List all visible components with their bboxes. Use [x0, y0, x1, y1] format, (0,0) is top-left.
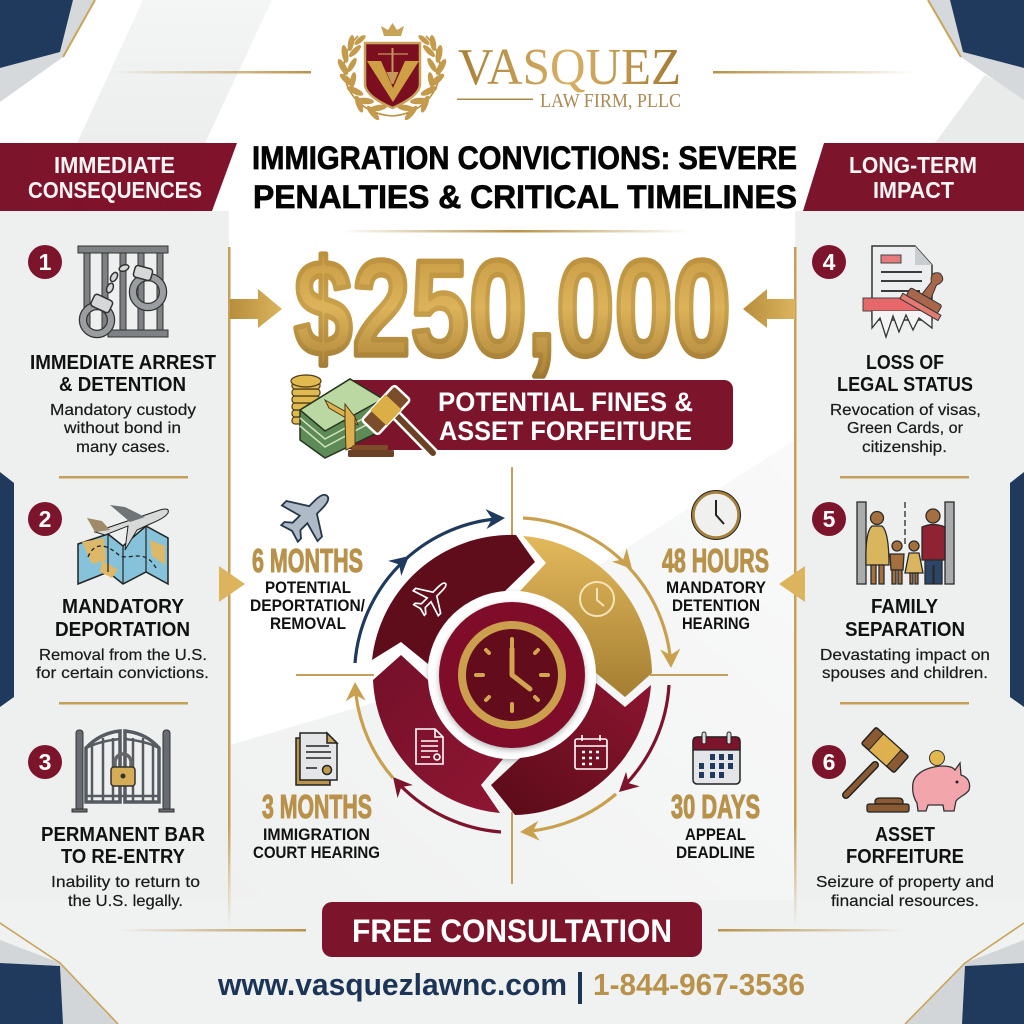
icon: plane: [272, 478, 345, 551]
arrow: gold top right: [523, 518, 681, 668]
banner: immediate consequences: [0, 143, 237, 211]
title: PENALTIES & CRITICAL TIMELINES: [253, 179, 797, 215]
logo subtitle: LAW FIRM, PLLC: [540, 90, 681, 112]
item 1: arrest: many cases.: [76, 439, 170, 456]
contact line: [217, 967, 805, 1004]
icon: separated family: [857, 502, 954, 584]
banner: immediate consequences: IMMEDIATE: [54, 152, 175, 178]
corner: bottom right: [905, 923, 1024, 1024]
corner: bottom left: [0, 923, 118, 1024]
title: IMMIGRATION CONVICTIONS: SEVERE: [252, 140, 797, 176]
arrow: maroon right: [612, 685, 669, 799]
badge 1: 1: [39, 249, 52, 275]
item 4: legal status: Revocation of visas,: [830, 402, 981, 419]
segment: 3 months: [373, 655, 503, 813]
big amount: $250,000: [294, 232, 731, 384]
corner: top left: [0, 0, 95, 102]
arrow: gold bottom: [519, 794, 616, 842]
call to action: [322, 902, 702, 957]
item 2: deportation: for certain convictions.: [36, 665, 209, 682]
icon: document: [296, 733, 337, 785]
item 6: asset forfeiture: FORFEITURE: [846, 845, 964, 868]
icon: handcuffs and bars: [78, 246, 168, 337]
item 5: family separation: spouses and children.: [822, 665, 988, 682]
item 4: legal status: [812, 245, 981, 456]
timeline: 3 months: IMMIGRATION: [263, 825, 370, 844]
item 6: asset forfeiture: Seizure of property and: [816, 874, 994, 891]
badge 3: [28, 745, 62, 779]
arrow: navy: [355, 508, 506, 663]
item 2: deportation: MANDATORY: [62, 595, 184, 618]
item 5: family separation: SEPARATION: [845, 618, 965, 641]
badge 5: [812, 502, 846, 536]
item 6: asset forfeiture: [812, 727, 994, 910]
icon: white plane: [407, 571, 458, 622]
item 5: family separation: FAMILY: [871, 595, 938, 618]
timeline: 3 months: [253, 733, 380, 862]
fines pill: [345, 380, 733, 450]
item 3: re-entry bar: [28, 730, 205, 910]
icon: white clock: [580, 582, 614, 616]
timeline: 6 months: REMOVAL: [270, 614, 346, 633]
item 3: re-entry bar: Inability to return to: [51, 874, 200, 891]
column rule: right: [794, 247, 796, 927]
timeline: 30 days: DEADLINE: [676, 843, 755, 862]
corner: top right: [928, 0, 1024, 100]
timeline: 3 months: COURT HEARING: [253, 843, 380, 862]
logo emblem: [336, 23, 448, 122]
banner: long-term impact: IMPACT: [873, 177, 954, 203]
item 1: arrest: Mandatory custody: [50, 402, 196, 419]
timeline: 30 days: 30 DAYS: [671, 788, 760, 825]
timeline: 6 months: DEPORTATION/: [250, 596, 365, 615]
fines pill: ASSET FORFEITURE: [439, 416, 692, 446]
badge 4: 4: [823, 249, 836, 275]
item 6: asset forfeiture: financial resources.: [831, 893, 979, 910]
item 1: arrest: IMMEDIATE ARREST: [30, 351, 216, 374]
contact line: www.vasquezlawnc.com: [217, 967, 567, 1002]
item 4: legal status: citizenship.: [862, 439, 947, 456]
timeline: 48 hours: HEARING: [682, 614, 750, 633]
logo: [336, 23, 681, 122]
icon: white document: [416, 729, 443, 764]
icon: coins, cash and gavel: [291, 375, 435, 458]
item 1: arrest: [28, 245, 216, 456]
item 4: legal status: LEGAL STATUS: [837, 373, 973, 396]
icon: shredded document and stamp: [863, 246, 959, 337]
fines pill: POTENTIAL FINES &: [438, 387, 693, 417]
item 4: legal status: LOSS OF: [866, 351, 944, 374]
side accent: left navy: [0, 472, 14, 707]
badge 5: 5: [823, 506, 836, 532]
cycle diagram: [372, 535, 652, 815]
item 3: re-entry bar: TO RE-ENTRY: [61, 845, 185, 868]
timeline: 3 months: 3 MONTHS: [262, 788, 372, 825]
arrow: right to timeline: [779, 566, 805, 602]
timeline: 6 months: [250, 478, 365, 633]
arrow: right to amount: [743, 289, 795, 328]
arrow: left to amount: [230, 289, 282, 328]
item 2: deportation: Removal from the U.S.: [39, 647, 207, 664]
badge 1: [28, 245, 62, 279]
call to action: FREE CONSULTATION: [352, 913, 672, 949]
item 5: family separation: Devastating impact on: [820, 647, 990, 664]
banner: long-term impact: [803, 143, 1024, 211]
item 4: legal status: Green Cards, or: [847, 420, 964, 437]
badge 2: 2: [39, 506, 51, 532]
item 3: re-entry bar: PERMANENT BAR: [41, 823, 205, 846]
icon: calendar: [693, 732, 740, 784]
timeline: 6 months: 6 MONTHS: [252, 542, 363, 579]
timeline: 48 hours: 48 HOURS: [662, 542, 769, 579]
item 1: arrest: without bond in: [63, 420, 181, 437]
banner: immediate consequences: CONSEQUENCES: [28, 177, 202, 203]
central clock: [439, 602, 585, 748]
timeline: 30 days: [671, 732, 760, 862]
arrow: gold left: [345, 682, 393, 778]
arrow: left to timeline: [219, 566, 245, 602]
item 5: family separation: [812, 502, 990, 682]
badge 6: [812, 745, 846, 779]
timeline: 30 days: APPEAL: [685, 825, 746, 844]
badge 4: [812, 245, 846, 279]
segment: 30 days: [491, 683, 651, 815]
logo wordmark: VASQUEZ: [458, 39, 681, 96]
badge 6: 6: [823, 749, 835, 775]
timeline: 6 months: POTENTIAL: [265, 578, 351, 597]
icon: locked gate: [72, 730, 174, 812]
timeline: 48 hours: [662, 490, 769, 633]
item 1: arrest: & DETENTION: [59, 373, 186, 396]
cycle arrows: [345, 508, 681, 842]
column rule: left: [228, 247, 230, 927]
title: [252, 140, 797, 215]
icon: gavel and piggy bank: [846, 727, 970, 812]
banner: long-term impact: LONG-TERM: [849, 152, 977, 178]
item 2: deportation: DEPORTATION: [55, 618, 190, 641]
icon: clock: [692, 490, 740, 540]
timeline: 48 hours: MANDATORY: [666, 578, 767, 597]
timeline: 48 hours: DETENTION: [672, 596, 760, 615]
item 3: re-entry bar: the U.S. legally.: [68, 893, 183, 910]
item 2: deportation: [28, 502, 209, 682]
item 6: asset forfeiture: ASSET: [875, 823, 935, 846]
icon: map and plane: [78, 505, 168, 584]
segment: 6 months: [372, 535, 535, 664]
badge 3: 3: [39, 749, 51, 775]
arrow: maroon bottom: [385, 771, 501, 832]
badge 2: [28, 502, 62, 536]
contact line: 1-844-967-3536: [593, 967, 805, 1002]
side accent: right navy: [1010, 472, 1024, 707]
segment: 48 hours: [520, 536, 652, 697]
timeline cross lines: [296, 467, 728, 884]
icon: white calendar: [575, 735, 607, 769]
